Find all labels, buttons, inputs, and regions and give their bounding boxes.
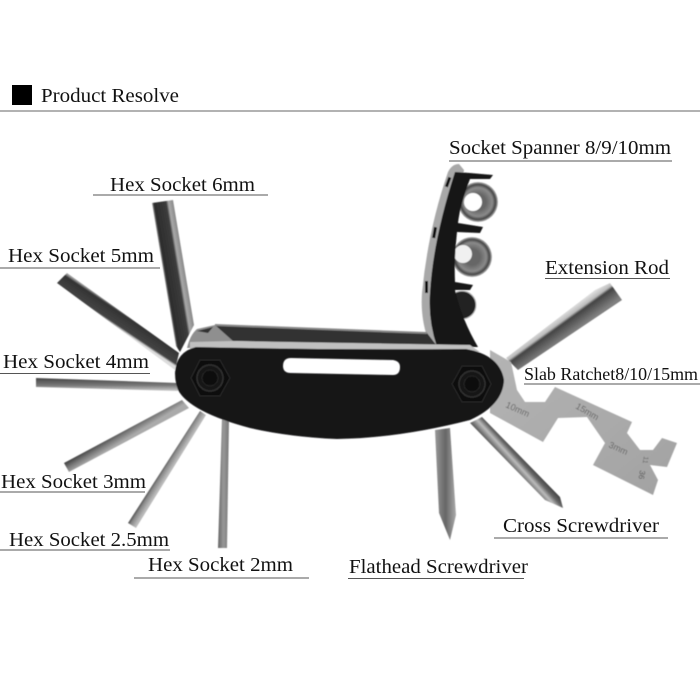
bolt: right (452, 366, 491, 402)
section header: Product Resolve: Product Resolve (41, 85, 179, 107)
bolt: left (191, 360, 230, 396)
tool: slab ratchet: 15mm (574, 401, 601, 422)
label: Flathead Screwdriver: Flathead Screwdriver (349, 556, 528, 578)
tool: cross screwdriver (470, 417, 563, 508)
label: Socket Spanner: Socket Spanner 8/9/10mm (449, 137, 671, 159)
tool: slab ratchet: 36 (636, 470, 647, 481)
tool: hex socket 3mm (64, 400, 189, 472)
tool: socket spanner arm (422, 164, 498, 347)
tool: extension rod (506, 283, 622, 370)
tool: flathead screwdriver (435, 428, 456, 540)
tool: slab ratchet: 10mm (504, 400, 531, 419)
tool: hex socket 4mm (36, 378, 178, 391)
tool: hex socket 2mm (218, 418, 229, 548)
section header: Product Resolve (0, 85, 700, 112)
label: Hex Socket 6mm: Hex Socket 6mm (110, 174, 255, 196)
tool: hex socket 5mm (57, 273, 179, 370)
label: Slab Ratchet: Slab Ratchet8/10/15mm (524, 364, 698, 384)
label: Extension Rod: Extension Rod (545, 257, 669, 279)
body: rear plate (187, 324, 480, 352)
tool: hex socket 6mm (152, 200, 194, 352)
label: Hex Socket 5mm: Hex Socket 5mm (8, 245, 154, 267)
multi-tool illustration (36, 164, 677, 548)
label: Hex Socket 2.5mm: Hex Socket 2.5mm (9, 529, 169, 551)
label: Cross Screwdriver: Cross Screwdriver (503, 515, 659, 537)
body: black handle with slot (175, 347, 504, 439)
label: Hex Socket 4mm: Hex Socket 4mm (3, 351, 149, 373)
label: Hex Socket 3mm: Hex Socket 3mm (1, 471, 146, 493)
tool: slab ratchet (490, 350, 677, 495)
tool: slab ratchet: 3mm (607, 440, 630, 457)
label: Hex Socket 2mm: Hex Socket 2mm (148, 554, 293, 576)
tool: hex socket 2.5mm (128, 411, 206, 528)
tool: slab ratchet: 11 (641, 456, 649, 464)
